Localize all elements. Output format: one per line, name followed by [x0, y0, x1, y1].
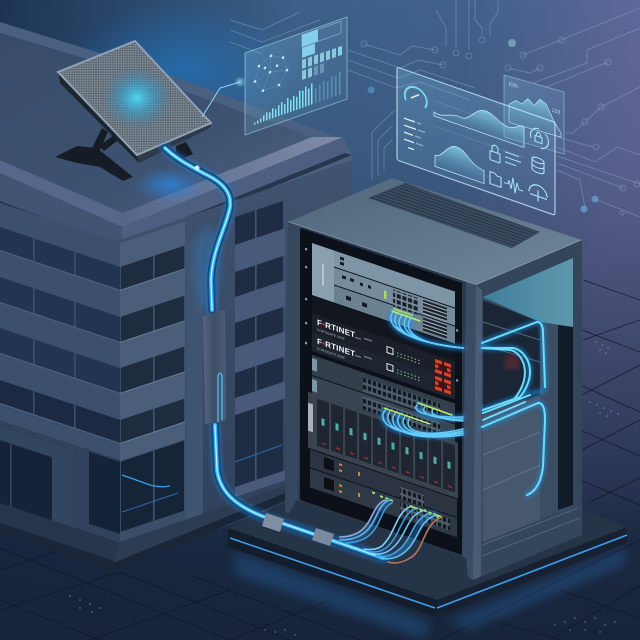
icon: dial	[529, 182, 547, 205]
cable wall glow	[195, 226, 219, 314]
glow on roof	[134, 167, 206, 203]
rack top	[288, 178, 582, 285]
panel labels: E05	[509, 81, 518, 90]
firewall 2: F▪RTINET	[317, 337, 355, 359]
wave chart 1	[434, 93, 524, 157]
red display	[434, 374, 452, 396]
plinth left	[0, 503, 121, 563]
plinth right	[113, 486, 285, 563]
dish face	[58, 41, 211, 155]
icon: lock	[490, 144, 500, 163]
rack interior shelves	[483, 300, 573, 542]
cables in rack side	[482, 322, 545, 495]
rack top vent	[368, 183, 540, 248]
rack equipment	[300, 228, 462, 555]
panel labels	[509, 81, 560, 116]
wing windows	[235, 201, 283, 487]
entrance door	[0, 427, 73, 530]
circuit traces background	[230, 0, 640, 217]
rack left post	[285, 222, 302, 516]
icon: waveform	[504, 174, 523, 196]
red display	[434, 357, 452, 379]
blade server	[308, 392, 458, 499]
cable clamp 2	[312, 528, 334, 546]
right wall base	[120, 160, 352, 565]
shelf shadow	[312, 296, 455, 363]
power units	[310, 449, 457, 537]
rack front frame	[285, 222, 476, 580]
cable clamp 1	[262, 513, 284, 532]
glass reflection	[483, 258, 573, 327]
cables on rack front	[383, 311, 463, 437]
cables at rack bottom	[340, 498, 443, 563]
rack side plinth lines	[482, 508, 580, 556]
switch stack	[312, 243, 455, 344]
rack side glass	[482, 258, 573, 540]
wing mullions	[255, 210, 257, 480]
cable core	[165, 148, 383, 558]
firewall 2	[312, 332, 455, 400]
icon: database	[532, 156, 544, 175]
roof rim right	[122, 137, 343, 227]
panel: building	[0, 22, 352, 572]
rack near post	[462, 282, 482, 580]
waveform	[509, 90, 561, 137]
port leds	[384, 311, 452, 424]
main cable	[165, 148, 383, 558]
right corner windows	[121, 246, 184, 532]
sfp cages	[423, 300, 447, 322]
dish stand	[55, 128, 193, 181]
window reflection lower	[122, 493, 178, 512]
gauge	[405, 84, 427, 108]
cable color	[165, 148, 383, 558]
wing ledges	[235, 228, 285, 497]
glass frame post	[473, 285, 482, 580]
icon: folder	[490, 172, 501, 187]
switch ports	[393, 290, 418, 315]
left wall	[0, 203, 121, 563]
left wall windows	[0, 227, 121, 443]
ledge highlights	[0, 250, 121, 444]
floor reflections	[235, 548, 625, 640]
rack side frame	[473, 240, 582, 580]
dish glow	[101, 66, 173, 130]
cable glow	[165, 148, 383, 558]
platform light strip	[230, 535, 627, 608]
cable joint	[194, 166, 200, 170]
small ports	[340, 257, 371, 309]
cable jacket	[165, 148, 383, 558]
ledge highlights	[120, 268, 185, 444]
plinth lip	[0, 493, 285, 572]
dashboard: rear waveform	[504, 75, 564, 154]
roof fascia right	[122, 137, 352, 267]
dashboard: main metrics	[397, 67, 555, 215]
metric lines	[404, 117, 425, 154]
rear wing section	[235, 200, 285, 497]
firewall 1: FORTIGATE 600E	[317, 328, 346, 341]
level bars	[302, 21, 342, 80]
base platform	[228, 500, 627, 617]
green leds	[384, 290, 413, 317]
signal line	[202, 82, 240, 117]
firewall 2: FORTIGATE 600E	[317, 347, 346, 360]
right corner section	[120, 221, 186, 542]
bar chart	[254, 71, 340, 125]
rack kickplate	[288, 500, 468, 578]
ground window	[89, 452, 120, 534]
list lines	[505, 152, 521, 167]
fascia shadow	[122, 153, 352, 248]
rack interior	[300, 228, 462, 555]
wing window reflection	[235, 445, 282, 462]
bundle port leds	[386, 498, 443, 517]
roof fascia left	[0, 173, 122, 247]
left wall ledges	[0, 203, 121, 460]
building pier	[186, 236, 203, 522]
panel labels: 223	[552, 108, 560, 116]
rack top edge	[288, 222, 582, 285]
building rear parapet	[0, 22, 345, 152]
left wall mullions	[33, 238, 76, 428]
right corner mullions	[153, 255, 155, 521]
window reflection	[122, 475, 170, 487]
floor light dots	[69, 341, 619, 636]
panel: satellite dish	[55, 41, 243, 181]
dashboard: network and bars	[245, 17, 347, 135]
rail rivets	[305, 248, 458, 396]
firewall 1	[312, 313, 455, 381]
wave chart 2	[435, 139, 484, 183]
roof surface	[0, 33, 312, 213]
sleeve light slot	[218, 373, 222, 422]
panel: server rack	[285, 178, 582, 580]
signal dot	[237, 79, 243, 85]
roof rim	[0, 160, 123, 227]
right corner ledges	[120, 221, 185, 461]
firewall 1: F▪RTINET	[317, 318, 355, 340]
dish underside	[58, 72, 139, 163]
network diagram	[254, 49, 288, 95]
floor tiles	[0, 280, 640, 640]
network switches	[312, 355, 455, 442]
icon: rotating lock	[530, 126, 549, 151]
cable sleeve	[203, 310, 226, 424]
